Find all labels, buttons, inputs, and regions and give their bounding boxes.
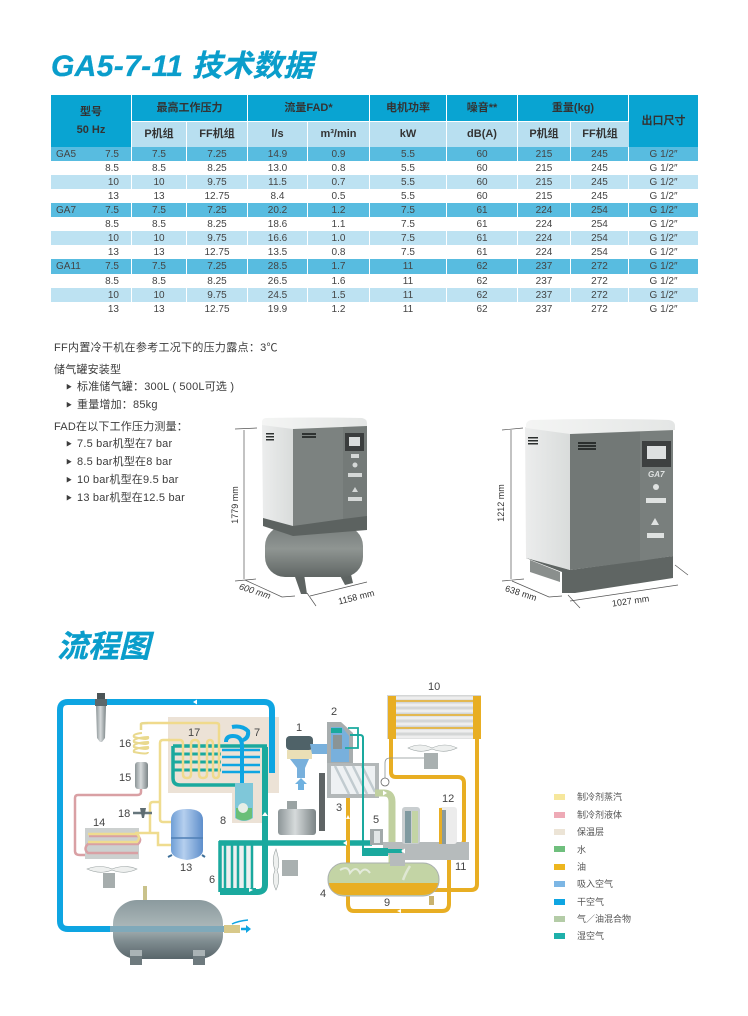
GA5 rows: 215: [536, 162, 552, 174]
wet air pipe: [220, 747, 265, 892]
GA5 rows: 8.25: [207, 162, 227, 174]
component numbers: 6: [209, 874, 215, 886]
GA7 rows: 7.25: [207, 204, 227, 216]
GA5 rows: 0.8: [332, 162, 345, 174]
flow diagram: [60, 681, 481, 965]
table header: FF机组: [199, 128, 235, 140]
oil pipes: [348, 739, 477, 911]
fan of oil cooler: [408, 745, 457, 769]
GA7 rows: 7.5: [105, 204, 119, 216]
GA11 rows: 28.5: [268, 261, 287, 272]
GA5 rows: 7.25: [207, 148, 227, 160]
GA11 rows: 1.6: [332, 276, 345, 286]
dimension labels: 600 mm: [238, 581, 272, 601]
condenser 14: [85, 828, 140, 859]
dimension labels: 638 mm: [504, 583, 538, 603]
GA7 rows: G 1/2″: [650, 246, 678, 258]
table header: [51, 95, 698, 147]
GA7 rows: 254: [591, 232, 608, 244]
legend: 制冷剂液体: [577, 809, 622, 820]
GA7 rows: [51, 203, 698, 258]
GA7 rows: 254: [591, 218, 608, 230]
component numbers: 8: [220, 815, 226, 827]
GA11 rows: 62: [476, 290, 488, 300]
air oil mix pipe: [375, 793, 392, 876]
component numbers: 16: [119, 738, 131, 750]
notes text block: 7.5 bar机型在7 bar: [77, 436, 172, 450]
coil 16: [134, 733, 148, 754]
notes text block: ▶: [66, 477, 72, 484]
component numbers: 12: [442, 793, 454, 805]
flow arrows: [193, 700, 405, 913]
dimension labels: [496, 484, 650, 609]
notes text block: 储气罐安装型: [54, 362, 121, 376]
notes text block: ▶: [66, 459, 72, 466]
GA11 rows: 26.5: [268, 276, 287, 286]
GA5 rows: 8.5: [152, 162, 166, 174]
GA7 rows: 254: [591, 246, 608, 258]
GA11 rows: 11: [403, 261, 413, 272]
minimum pressure valve 5: [362, 829, 402, 856]
filter: [95, 693, 107, 742]
door markings: [646, 470, 666, 538]
GA7 rows: 13: [108, 246, 119, 258]
dry air loop through separator: [226, 726, 248, 800]
GA11 rows: 272: [591, 290, 608, 300]
base: [526, 556, 673, 593]
GA7 rows: 10: [108, 232, 119, 244]
table header: 出口尺寸: [642, 114, 686, 126]
table header: l/s: [271, 128, 284, 140]
legend: 水: [577, 844, 586, 855]
GA5 rows: 8.5: [105, 162, 119, 174]
table header: 噪音**: [467, 102, 497, 114]
condensate separator 8: [235, 783, 253, 821]
dimension labels: 1027 mm: [611, 593, 650, 609]
GA5 rows: 215: [536, 148, 552, 160]
table header: 重量(kg): [552, 102, 594, 114]
oil stop valve: [429, 896, 434, 905]
GA7 rows: 7.5: [401, 218, 415, 230]
table header: 最高工作压力: [156, 102, 222, 114]
GA5 rows: 13: [108, 190, 119, 202]
GA5 rows: 5.5: [401, 148, 415, 160]
belt drive: [319, 773, 325, 831]
GA5 rows: G 1/2″: [650, 190, 678, 202]
heading: flow chart: 流程图: [57, 629, 155, 664]
refrigerant receiver 13: [168, 809, 205, 860]
GA5 rows: 11.5: [268, 176, 287, 188]
liquid refrigerant pipe: [75, 789, 141, 855]
air filter 1: [286, 736, 330, 790]
table header: 50 Hz: [77, 124, 105, 136]
table header: P机组: [144, 128, 174, 140]
GA7 rows: 7.5: [152, 204, 166, 216]
GA5 rows: 60: [476, 162, 488, 174]
GA5 rows: 10: [108, 176, 119, 188]
legend: [554, 791, 631, 941]
GA11 rows: 1.7: [332, 261, 345, 272]
title: GA5-7-11 technical data: GA5-7-11 技术数据: [51, 50, 318, 83]
GA5 rows: G 1/2″: [650, 148, 678, 160]
component numbers: 17: [188, 727, 200, 739]
legend: 吸入空气: [577, 878, 613, 889]
GA11 rows: 19.9: [268, 304, 287, 314]
GA7 rows: G 1/2″: [650, 204, 678, 216]
GA7 rows: 12.75: [204, 246, 230, 258]
GA7 rows: GA7: [56, 204, 76, 216]
logo: [266, 433, 316, 440]
GA7 rows: 7.5: [401, 232, 415, 244]
GA11 rows: 10: [108, 290, 119, 300]
display: [642, 441, 671, 467]
side panel: [525, 427, 570, 570]
GA5 rows: 245: [591, 162, 608, 174]
GA7 rows: 61: [476, 232, 488, 244]
GA7 rows: 1.1: [332, 218, 345, 230]
aftercooler 6: [219, 840, 372, 892]
refrigerant lines to receiver: [135, 740, 172, 845]
GA7 rows: 61: [476, 204, 488, 216]
GA11 rows: 12.75: [204, 304, 230, 314]
dimension labels: 1779 mm: [230, 486, 240, 524]
receiver 15: [135, 762, 148, 789]
GA5 rows: 13.0: [268, 162, 287, 174]
GA7 rows: 1.0: [332, 232, 345, 244]
dimension labels: 1212 mm: [496, 484, 506, 522]
GA11 rows: 11: [403, 304, 413, 314]
GA5 rows: 14.9: [268, 148, 287, 160]
notes text block: 13 bar机型在12.5 bar: [77, 490, 185, 504]
GA5 rows: 60: [476, 148, 488, 160]
oil separator vessel 4: [328, 863, 439, 896]
component numbers: 13: [180, 862, 192, 874]
lid: [262, 418, 367, 429]
GA5 rows: 10: [153, 176, 165, 188]
display: [345, 433, 364, 451]
GA7 rows: 13.5: [268, 246, 287, 258]
GA11 rows: 237: [536, 304, 552, 314]
GA5 rows: G 1/2″: [650, 176, 678, 188]
GA5 rows: 245: [591, 190, 608, 202]
GA5 rows: 5.5: [401, 176, 415, 188]
GA7 rows: 13: [153, 246, 165, 258]
legend: 保温层: [577, 826, 604, 837]
GA11 rows: 1.2: [332, 304, 345, 314]
GA11 rows: G 1/2″: [650, 290, 678, 300]
notes text block: ▶: [66, 441, 72, 448]
notes text block: ▶: [66, 402, 72, 409]
table header: 型号: [80, 106, 102, 118]
GA5 rows: 8.4: [271, 190, 284, 202]
GA7 rows: 8.5: [105, 218, 119, 230]
component numbers: 14: [93, 817, 105, 829]
GA11 rows: 8.5: [152, 276, 166, 286]
tank: [265, 526, 363, 594]
GA11 rows: 1.5: [332, 290, 345, 300]
separator element: [402, 807, 420, 844]
GA5 rows: 13: [153, 190, 165, 202]
notes text block: 标准储气罐：300L ( 500L可选 ): [77, 379, 234, 393]
condenser fan: [87, 866, 137, 888]
GA5 rows: 9.75: [207, 176, 227, 188]
GA7 rows: 61: [476, 246, 488, 258]
wet air return line: [350, 735, 395, 851]
notes text block: 8.5 bar机型在8 bar: [77, 454, 172, 468]
GA11 rows: GA11: [56, 261, 81, 272]
GA7 rows: 9.75: [207, 232, 227, 244]
component numbers: 7: [254, 727, 260, 739]
component numbers: [93, 681, 466, 909]
GA5 rows: 245: [591, 148, 608, 160]
door markings: [348, 454, 362, 501]
GA7 rows: 254: [591, 204, 608, 216]
GA11 rows: 11: [403, 290, 413, 300]
GA11 rows: 7.5: [152, 261, 166, 272]
table header: 流量FAD*: [284, 102, 333, 114]
GA7 rows: 8.25: [207, 218, 227, 230]
GA7 rows: 1.2: [332, 204, 345, 216]
legend: 油: [577, 861, 586, 872]
control door: [343, 424, 367, 519]
GA7 rows: G 1/2″: [650, 218, 678, 230]
component numbers: 9: [384, 897, 390, 909]
GA7 rows: 0.8: [332, 246, 345, 258]
GA5 rows: 215: [536, 176, 552, 188]
GA11 rows: G 1/2″: [650, 261, 678, 272]
legend: 干空气: [577, 896, 604, 907]
GA11 rows: 8.25: [207, 276, 227, 286]
GA5 rows: 0.7: [332, 176, 345, 188]
notes text block: FAD在以下工作压力测量：: [54, 420, 188, 433]
GA5 rows: 5.5: [401, 190, 415, 202]
front panel: [293, 426, 343, 526]
GA11 rows: 237: [536, 290, 552, 300]
oil cooler 10: [387, 695, 481, 739]
GA7 rows: 20.2: [268, 204, 287, 216]
lid: [526, 419, 675, 434]
GA11 rows: 237: [536, 261, 552, 272]
component numbers: 18: [118, 808, 130, 820]
base: [263, 516, 367, 536]
component numbers: 10: [428, 681, 440, 693]
GA5 rows: 245: [591, 176, 608, 188]
door markings: GA7: [648, 470, 665, 479]
GA11 rows: 272: [591, 276, 608, 286]
dimension labels: [230, 486, 375, 606]
table header: m³/min: [320, 128, 357, 140]
legend: 气／油混合物: [577, 913, 631, 924]
notes text block: ▶: [66, 495, 72, 502]
component numbers: 5: [373, 814, 379, 826]
component numbers: 1: [296, 722, 302, 734]
GA11 rows: 237: [536, 276, 552, 286]
table header: P机组: [529, 128, 559, 140]
evaporator: [148, 723, 267, 785]
front panel: [570, 430, 640, 570]
GA11 rows: 13: [108, 304, 119, 314]
dry air pipe: [60, 702, 272, 929]
GA7 rows: 224: [536, 246, 552, 258]
GA11 rows: 10: [153, 290, 165, 300]
dimension lines: [235, 428, 367, 606]
screw element 3: [327, 763, 379, 798]
notes text block: 10 bar机型在9.5 bar: [77, 472, 179, 486]
GA11 rows: G 1/2″: [650, 304, 678, 314]
insulation box: [168, 717, 279, 823]
GA11 rows: 24.5: [268, 290, 287, 300]
dimension labels: 1158 mm: [337, 588, 375, 606]
legend: 湿空气: [577, 930, 604, 941]
notes text block: [54, 340, 278, 504]
control door: [640, 428, 673, 561]
component numbers: 4: [320, 888, 326, 900]
GA5 rows: 215: [536, 190, 552, 202]
table header: kW: [400, 128, 416, 140]
GA5 rows: 7.5: [152, 148, 166, 160]
GA5 rows: [51, 147, 698, 202]
GA11 rows: 62: [476, 304, 488, 314]
GA7 rows: 7.5: [401, 246, 415, 258]
GA11 rows: 11: [403, 276, 413, 286]
air receiver: [110, 886, 251, 965]
GA11 rows: 272: [591, 304, 608, 314]
aftercooler fan: [273, 849, 298, 890]
notes text block: 重量增加：85kg: [77, 397, 158, 411]
table header: FF机组: [582, 128, 618, 140]
main motor: [278, 801, 316, 835]
dimension lines: [502, 428, 688, 608]
GA11 rows: 13: [153, 304, 165, 314]
GA5 rows: GA5: [56, 148, 76, 160]
notes text block: FF内置冷干机在参考工况下的压力露点：3℃: [54, 340, 278, 354]
GA11 rows: 272: [591, 261, 608, 272]
table header: dB(A): [467, 128, 497, 140]
specification table: [51, 95, 698, 314]
GA7 rows: 224: [536, 204, 552, 216]
GA7 rows: 224: [536, 232, 552, 244]
GA5 rows: 7.5: [105, 148, 119, 160]
GA7 rows: 7.5: [401, 204, 415, 216]
GA5 rows: 60: [476, 176, 488, 188]
table header: 电机功率: [386, 102, 430, 114]
component numbers: 11: [455, 861, 466, 873]
product image: floor-mounted compressor with dimensions: [496, 419, 688, 609]
component numbers: 3: [336, 802, 342, 814]
GA7 rows: 10: [153, 232, 165, 244]
GA11 rows: 8.5: [105, 276, 119, 286]
GA5 rows: 12.75: [204, 190, 230, 202]
GA7 rows: G 1/2″: [650, 232, 678, 244]
side panel: [262, 424, 293, 526]
GA7 rows: 61: [476, 218, 488, 230]
inlet valve 2: [327, 722, 358, 763]
logo: [528, 437, 596, 450]
component numbers: 15: [119, 772, 131, 784]
GA7 rows: 18.6: [268, 218, 287, 230]
product image: tank-mounted compressor with dimensions: [230, 418, 375, 606]
oil filter 12: [439, 807, 457, 844]
GA11 rows: 62: [476, 276, 488, 286]
GA5 rows: G 1/2″: [650, 162, 678, 174]
GA5 rows: 60: [476, 190, 488, 202]
GA5 rows: 5.5: [401, 162, 415, 174]
GA11 rows: 62: [476, 261, 488, 272]
GA11 rows: [51, 259, 698, 314]
GA5 rows: 0.9: [332, 148, 345, 160]
component numbers: 2: [331, 706, 337, 718]
expansion valve 18: [133, 808, 152, 818]
GA7 rows: 224: [536, 218, 552, 230]
GA7 rows: 8.5: [152, 218, 166, 230]
GA7 rows: 16.6: [268, 232, 287, 244]
GA11 rows: G 1/2″: [650, 276, 678, 286]
GA11 rows: 7.25: [207, 261, 227, 272]
GA5 rows: 0.5: [332, 190, 345, 202]
legend: 制冷剂蒸汽: [577, 791, 622, 802]
temperature sensor: [381, 758, 424, 786]
GA11 rows: 7.5: [105, 261, 119, 272]
notes text block: ▶: [66, 384, 72, 391]
manifold block: [383, 842, 469, 866]
GA11 rows: 9.75: [207, 290, 227, 300]
